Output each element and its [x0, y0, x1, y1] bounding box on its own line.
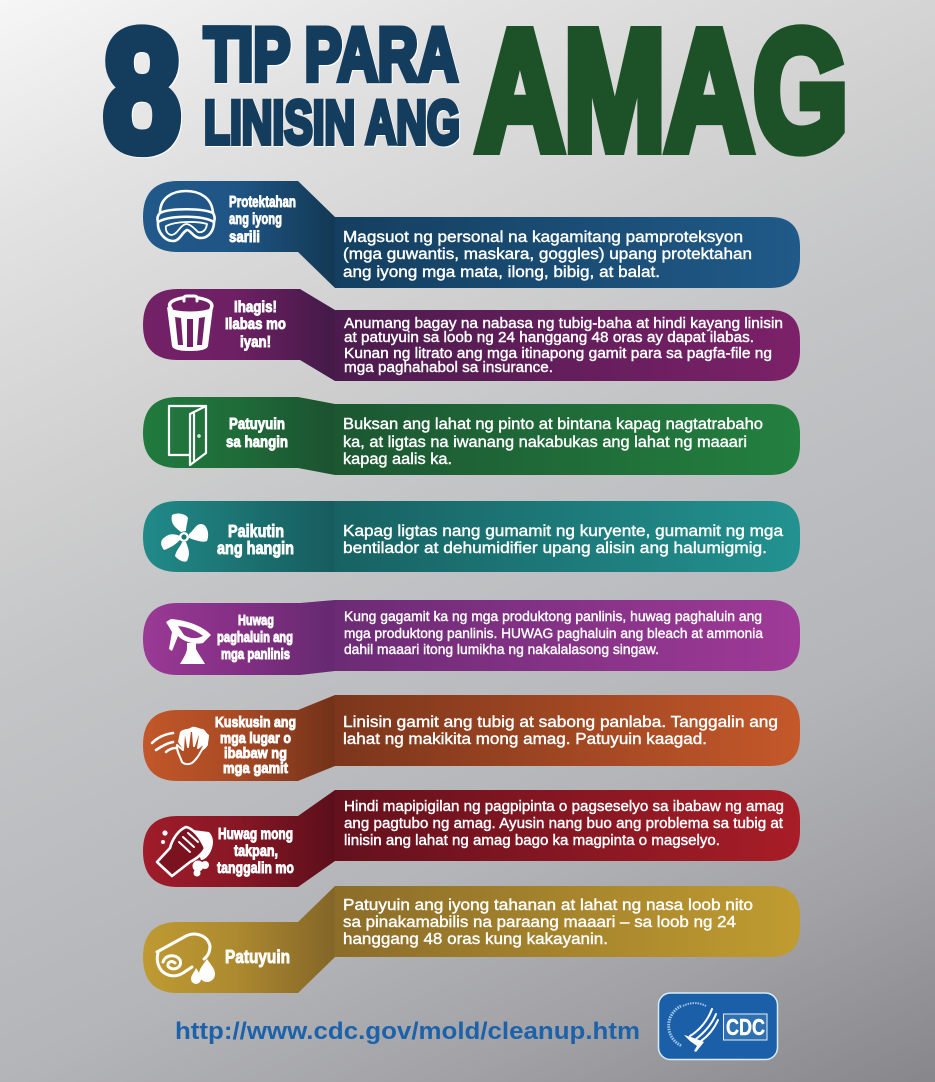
tip 4: circulate air: [143, 501, 800, 572]
CDC mark: CDC: [726, 1014, 765, 1040]
label: iyan!: [240, 334, 271, 351]
description: lahat ng makikita mong amag. Patuyuin kaagad.: [343, 731, 707, 748]
description: ang pagtubo ng amag. Ayusin nang buo ang problema sa tubig at: [344, 816, 783, 832]
description: [344, 799, 784, 849]
description: ka, at ligtas na iwanang nakabukas ang lahat ng maaari: [343, 434, 747, 451]
url link: http://www.cdc.gov/mold/cleanup.htm: [175, 1018, 640, 1045]
icon: spray bottle: [166, 619, 211, 664]
label: mga lugar o: [220, 730, 291, 747]
description: at patuyuin sa loob ng 24 hanggang 48 oras ay dapat ilabas.: [344, 330, 754, 346]
label: [217, 826, 294, 877]
description: [344, 316, 783, 376]
description: Hindi mapipigilan ng pagpipinta o pagseselyo sa ibabaw ng amag: [344, 799, 784, 815]
title: LINISIN ANG: LINISIN ANG: [204, 88, 460, 156]
icon: hand wiping: [152, 727, 209, 764]
description: Kapag ligtas nang gumamit ng kuryente, gumamit ng mga: [343, 523, 783, 540]
icon: trash can: [167, 296, 213, 351]
description: mga paghahabol sa insurance.: [344, 360, 553, 376]
tip 6 banner: [143, 695, 800, 781]
description: linisin ang lahat ng amag bago ka magpinta o magselyo.: [344, 833, 720, 849]
title: TIP PARA: TIP PARA: [204, 12, 458, 96]
icon: HHS eagle: [669, 1003, 718, 1052]
label: [225, 299, 286, 351]
label: takpan,: [234, 843, 278, 860]
label: Huwag mong: [218, 826, 293, 843]
tip 8 banner: [143, 886, 800, 993]
label: Huwag: [238, 613, 274, 629]
description: mga produktong panlinis. HUWAG paghaluin ang bleach at ammonia: [344, 625, 763, 641]
icon: open door: [169, 406, 206, 465]
description: [343, 897, 753, 948]
tip 5 banner: [143, 600, 800, 675]
label: tanggalin mo: [217, 860, 294, 877]
label: ibabaw ng: [224, 745, 287, 762]
tip 8: dry: [143, 886, 800, 993]
logo: CDC and HHS: [658, 993, 778, 1060]
description: hanggang 48 oras kung kakayanin.: [343, 931, 608, 948]
tip 6: scrub surfaces: [143, 695, 800, 781]
tip 7: do not cover, remove: [143, 790, 800, 887]
logo background: [658, 993, 778, 1060]
description: [343, 416, 763, 468]
label: Paikutin: [228, 521, 284, 541]
label: mga gamit: [223, 760, 288, 777]
tip 1 banner: [143, 181, 800, 288]
label: sa hangin: [226, 434, 288, 451]
description: Buksan ang lahat ng pinto at bintana kapag nagtatrabaho: [343, 416, 763, 433]
description: Kung gagamit ka ng mga produktong panlinis, huwag paghaluin ang: [344, 608, 762, 624]
description: [344, 608, 763, 657]
label: ang iyong: [229, 211, 282, 228]
tip 7 banner: [143, 790, 800, 887]
label: [229, 194, 296, 246]
label: [215, 714, 296, 777]
description: dahil maaari itong lumikha ng nakalalasong singaw.: [344, 641, 659, 657]
icon: fan: [161, 514, 208, 562]
label: sarili: [229, 229, 260, 246]
label: [217, 613, 293, 663]
icon: goggles: [157, 191, 215, 241]
description: Magsuot ng personal na kagamitang pamproteksyon: [343, 229, 743, 246]
label: Protektahan: [229, 194, 296, 211]
label: Kuskusin ang: [215, 714, 296, 731]
tip 2 banner: [143, 289, 800, 381]
label: mga panlinis: [221, 647, 290, 663]
description: Linisin gamit ang tubig at sabong panlaba. Tanggalin ang: [343, 714, 778, 731]
description: ang iyong mga mata, ilong, bibig, at balat.: [343, 264, 660, 281]
label: [217, 521, 294, 558]
description: (mga guwantis, maskara, goggles) upang protektahan: [343, 246, 752, 263]
description: [343, 714, 778, 748]
description: Anumang bagay na nabasa ng tubig-baha at hindi kayang linisin: [344, 316, 783, 332]
icon: hand with sponge: [157, 827, 213, 876]
tip 5: do not mix cleaners: [143, 600, 800, 675]
label: paghaluin ang: [217, 630, 293, 646]
icon: rolled towel with drops: [157, 934, 215, 984]
label: Patuyuin: [229, 416, 285, 433]
tip 4 banner: [143, 501, 800, 572]
description: bentilador at dehumidifier upang alisin ang halumigmig.: [343, 540, 767, 557]
description: kapag aalis ka.: [343, 451, 452, 468]
tip 3: air dry: [143, 397, 800, 475]
label: ang hangin: [217, 538, 294, 558]
description: [343, 523, 783, 557]
tip 1: protect yourself: [143, 181, 800, 288]
description: [343, 229, 752, 281]
description: Patuyuin ang iyong tahanan at lahat ng nasa loob nito: [343, 897, 753, 914]
label: Ihagis!: [234, 299, 277, 316]
label: [226, 416, 288, 451]
tip 2: throw it out: [143, 289, 800, 381]
title: number 8: 8: [103, 0, 181, 187]
description: Kunan ng litrato ang mga itinapong gamit para sa pagfa-file ng: [344, 346, 772, 362]
description: sa pinakamabilis na paraang maaari – sa loob ng 24: [343, 914, 736, 931]
title: [103, 0, 848, 187]
label: Patuyuin: [225, 947, 290, 967]
tip 3 banner: [143, 397, 800, 475]
label: Ilabas mo: [225, 316, 286, 333]
